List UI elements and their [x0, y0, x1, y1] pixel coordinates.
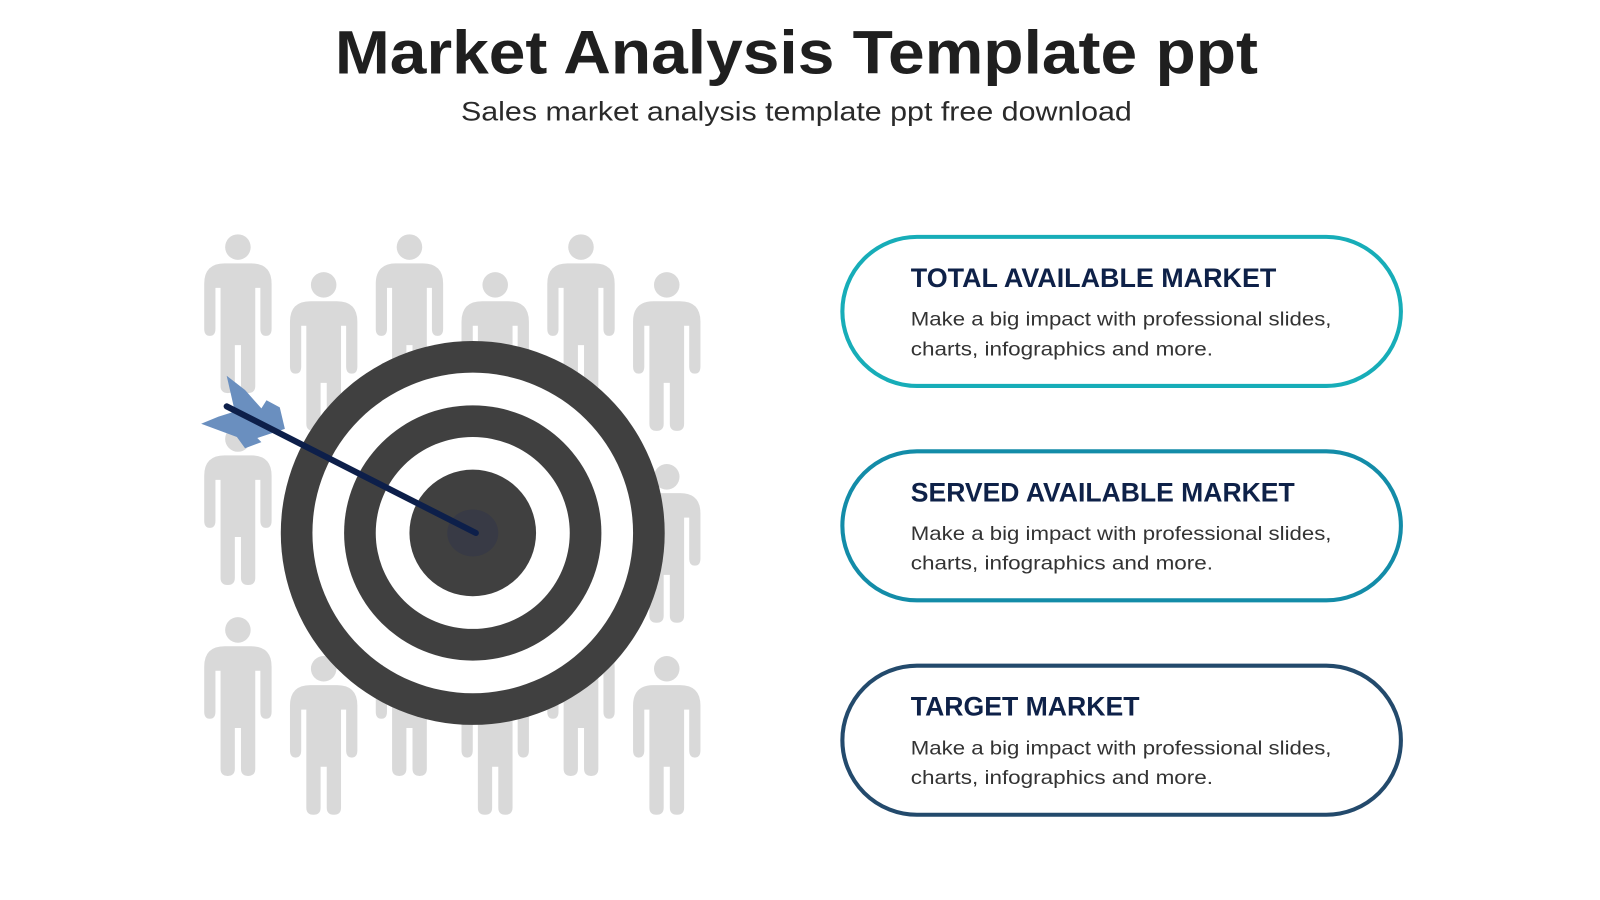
panel: total available market: charts, infographics and more. [911, 338, 1213, 360]
panel: total available market: TOTAL AVAILABLE MARKET [911, 263, 1276, 293]
panel: served available market [842, 451, 1401, 600]
subtitle: Sales market analysis template ppt free download [461, 96, 1132, 126]
panel: total available market [842, 237, 1401, 386]
panel: target market [842, 666, 1401, 815]
arrow [201, 376, 476, 533]
people crowd [204, 234, 700, 815]
panel: target market: TARGET MARKET [911, 692, 1140, 722]
panel: served available market: SERVED AVAILABLE MARKET [911, 477, 1295, 507]
target [281, 341, 665, 725]
panel: total available market: Make a big impact with professional slides, [911, 309, 1331, 331]
panel: served available market: charts, infographics and more. [911, 553, 1213, 575]
panel: served available market: Make a big impact with professional slides, [911, 523, 1331, 545]
panel: target market: charts, infographics and more. [911, 767, 1213, 789]
title: Market Analysis Template ppt [335, 19, 1258, 87]
panel: target market: Make a big impact with professional slides, [911, 738, 1331, 760]
